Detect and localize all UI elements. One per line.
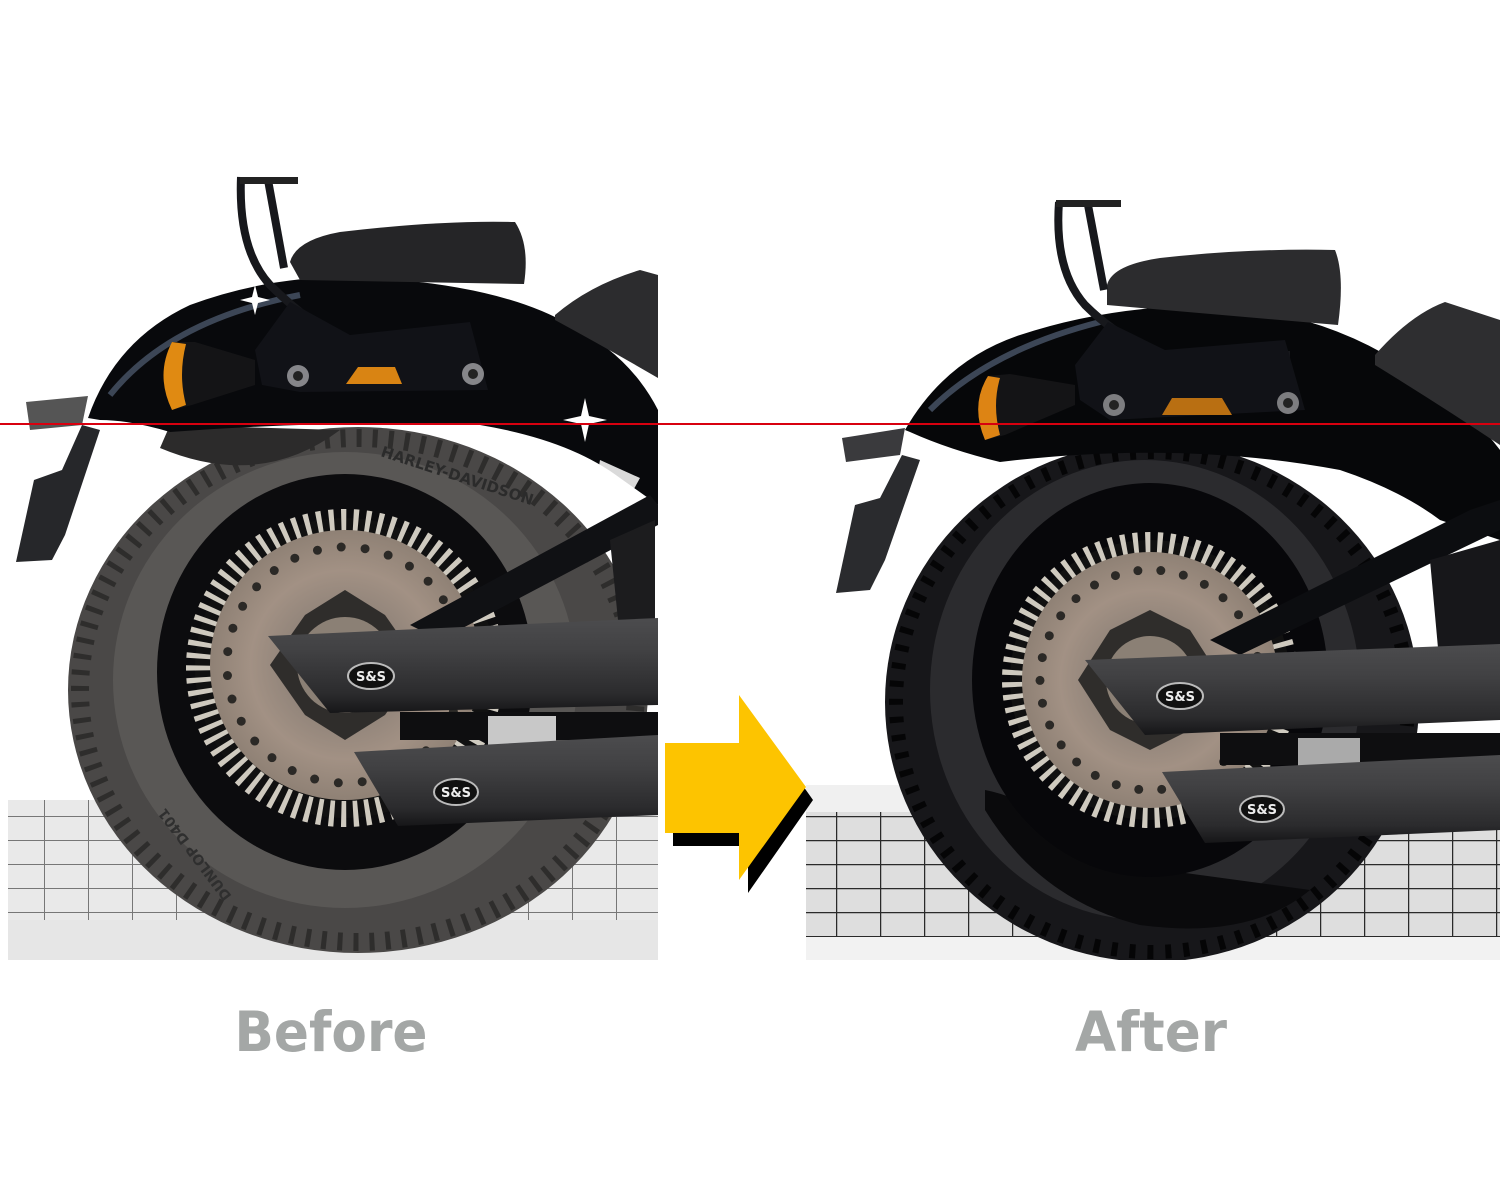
mount	[1220, 733, 1500, 765]
wheel rim	[157, 474, 533, 870]
amber reflector	[346, 367, 402, 384]
label: After: After	[1075, 1000, 1227, 1064]
spokes	[1010, 540, 1290, 820]
rear fender	[88, 277, 658, 505]
tyre lettering: HARLEY-DAVIDSON	[379, 443, 536, 509]
lower muffler	[354, 735, 658, 826]
brake disc	[210, 530, 480, 800]
licence bracket	[842, 428, 905, 462]
bracket	[255, 302, 488, 392]
swingarm	[410, 495, 658, 640]
sissy bar	[1058, 202, 1290, 355]
turn signal	[166, 342, 255, 410]
tyre shadow	[985, 790, 1310, 928]
rear tyre	[885, 442, 1419, 962]
lower muffler	[1162, 755, 1500, 843]
S&S badge: S&S	[1247, 803, 1277, 818]
panel: before photo	[8, 177, 658, 960]
paving tiles	[8, 800, 658, 920]
swingarm	[1210, 522, 1488, 654]
spokes	[195, 518, 495, 818]
S&S badge	[434, 779, 478, 805]
label: Before: Before	[234, 1000, 428, 1064]
fender shadow on tyre	[160, 425, 340, 465]
sissy bar	[236, 176, 302, 308]
S&S badge	[1240, 796, 1284, 822]
seat pad	[290, 222, 526, 284]
rear fender	[905, 305, 1500, 540]
bracket	[1075, 322, 1305, 420]
S&S badge	[1157, 683, 1203, 709]
upper muffler	[1085, 644, 1500, 735]
paving tiles	[806, 812, 1500, 937]
upper muffler	[268, 618, 658, 713]
tyre lettering: Dunlop: DUNLOP D401	[156, 805, 235, 903]
fender glare	[240, 285, 640, 505]
turn signal	[989, 374, 1075, 439]
red reference line	[0, 423, 1500, 425]
S&S badge	[348, 663, 394, 689]
S&S badge: S&S	[1165, 690, 1195, 705]
panel: after photo	[806, 200, 1500, 962]
licence bracket	[26, 396, 88, 430]
brake disc	[1022, 552, 1278, 808]
S&S badge: S&S	[441, 786, 471, 801]
seat pad	[1107, 250, 1341, 325]
mount	[400, 712, 658, 740]
S&S badge: S&S	[356, 670, 386, 685]
wheel rim	[972, 483, 1328, 877]
amber reflector	[1162, 398, 1232, 415]
arrow: before to after	[665, 695, 813, 893]
rear tyre	[68, 427, 648, 953]
